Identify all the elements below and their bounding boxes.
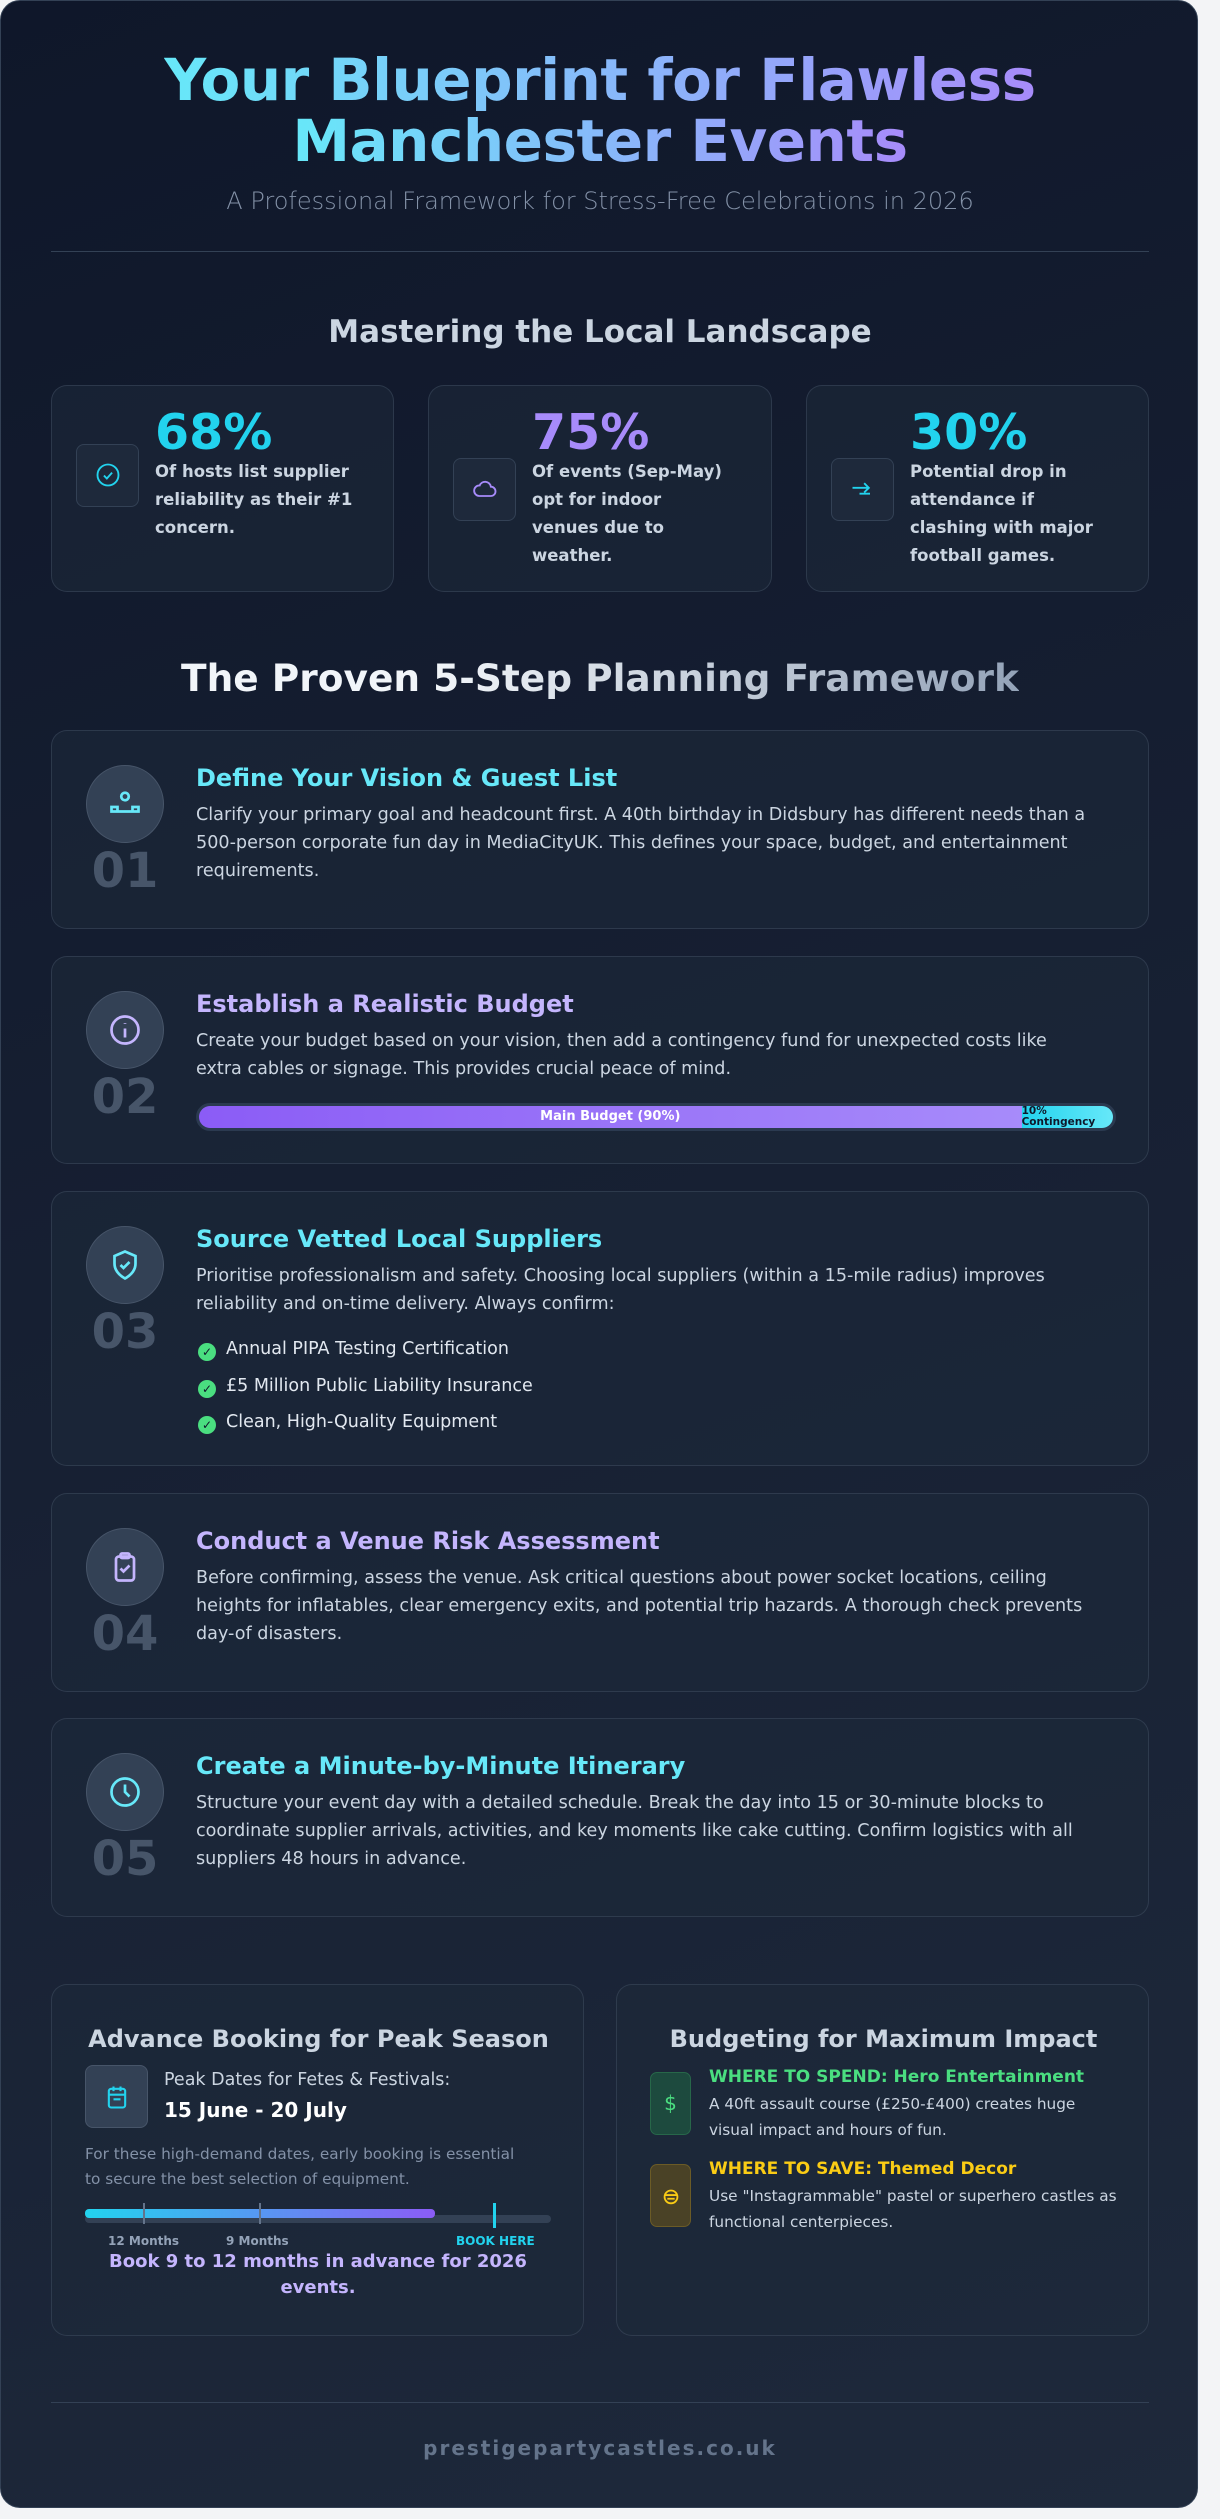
panel: budgeting: WHERE TO SAVE: Themed Decor — [709, 2159, 1016, 2179]
checklist: Clean, High-Quality Equipment — [226, 1412, 497, 1432]
panel: advance booking: to secure the best selection of equipment. — [85, 2170, 410, 2188]
icon: clock — [86, 1753, 164, 1831]
icon: people — [86, 765, 164, 843]
icon: clipboard — [86, 1528, 164, 1606]
icon: decor — [650, 2164, 691, 2227]
step 3 — [51, 1191, 1149, 1466]
footer: prestigepartycastles.co.uk — [423, 2436, 777, 2460]
step 4 — [51, 1493, 1149, 1692]
step 3: Source Vetted Local Suppliers — [196, 1225, 602, 1253]
budget bar: Contingency — [1022, 1116, 1095, 1128]
checklist: Annual PIPA Testing Certification — [226, 1339, 509, 1359]
step 1: 01 — [92, 843, 158, 899]
icon: check — [76, 444, 139, 506]
step 5: 05 — [92, 1831, 158, 1887]
step 3: 03 — [92, 1304, 158, 1360]
panel: advance booking — [51, 1984, 584, 2336]
budget bar — [196, 1103, 1116, 1131]
checklist — [198, 1339, 533, 1434]
step 5 — [51, 1718, 1149, 1917]
timeline: 9 Months — [226, 2234, 289, 2248]
step 5: Create a Minute-by-Minute Itinerary — [196, 1752, 685, 1780]
panel: advance booking: Book 9 to 12 months in advance for 2026 events. — [109, 2251, 527, 2298]
panel: budgeting: A 40ft assault course (£250-£400) creates huge visual impact and hours of fun. — [709, 2095, 1075, 2139]
icon: cloud — [453, 458, 516, 520]
checklist: ✓ — [202, 1345, 212, 1359]
step 5: Structure your event day with a detailed schedule. Break the day into 15 or 30-minute blocks to coordinate supplier arrivals, activities, and key moments like cake cutting. Confirm logistics with all suppliers 48 hours in advance. — [196, 1793, 1073, 1869]
panel: budgeting — [616, 1984, 1149, 2336]
icon: dollar — [650, 2072, 691, 2135]
panel: budgeting: WHERE TO SPEND: Hero Entertainment — [709, 2067, 1084, 2087]
stat card 2: 75% — [532, 404, 649, 461]
budget bar: 10% — [1022, 1105, 1047, 1117]
icon: dollar: $ — [664, 2091, 677, 2115]
timeline — [85, 2203, 551, 2248]
step 4: Before confirming, assess the venue. Ask critical questions about power socket locations, ceiling heights for inflatables, clear emergency exits, and potential trip hazards. A thorough check prevents day-of disasters. — [196, 1568, 1082, 1644]
stat card 1 — [51, 385, 394, 592]
title: Your Blueprint for Flawless — [164, 46, 1036, 114]
step 2 — [51, 956, 1149, 1164]
stat card 2 — [428, 385, 772, 592]
checklist: ✓ — [202, 1418, 212, 1432]
panel: advance booking: 15 June - 20 July — [164, 2098, 347, 2122]
panel: advance booking: Peak Dates for Fetes & Festivals: — [164, 2070, 450, 2090]
step 1 — [51, 730, 1149, 929]
panel: advance booking: Advance Booking for Peak Season — [88, 2025, 549, 2053]
stat card 2: Of events (Sep-May) opt for indoor — [532, 462, 722, 509]
title: Manchester Events — [292, 107, 908, 175]
icon: shield — [86, 1226, 164, 1304]
step title: Define Your Vision & Guest List — [196, 764, 617, 792]
step 2: Establish a Realistic Budget — [196, 990, 574, 1018]
step 2: 02 — [92, 1069, 158, 1125]
step 4: 04 — [92, 1606, 158, 1662]
timeline: 12 Months — [108, 2234, 179, 2248]
checklist: £5 Million Public Liability Insurance — [226, 1376, 533, 1396]
stat card 2: venues due to weather. — [532, 518, 664, 565]
checklist: ✓ — [202, 1382, 212, 1396]
heading: framework: The Proven 5-Step Planning Framework — [181, 656, 1019, 700]
stat card 1: 68% — [155, 404, 272, 461]
icon: info — [86, 991, 164, 1069]
stat card 1: Of hosts list supplier reliability as their #1 concern. — [155, 462, 352, 537]
timeline: BOOK HERE — [456, 2234, 535, 2248]
budget bar: Main Budget (90%) — [540, 1109, 680, 1124]
step 2: extra cables or signage. This provides crucial peace of mind. — [196, 1059, 731, 1079]
subtitle: A Professional Framework for Stress-Free Celebrations in 2026 — [226, 187, 974, 215]
stat card 3: Potential drop in attendance if clashing with major football games. — [910, 462, 1093, 565]
stat card 3 — [806, 385, 1149, 592]
panel: advance booking: For these high-demand dates, early booking is essential — [85, 2145, 514, 2163]
title — [164, 46, 1036, 175]
stat card 3: 30% — [910, 404, 1027, 461]
step 4: Conduct a Venue Risk Assessment — [196, 1527, 660, 1555]
step text: Clarify your primary goal and headcount first. A 40th birthday in Didsbury has different needs than a 500-person corporate fun day in MediaCityUK. This defines your space, budget, and entertainment requirements. — [196, 805, 1085, 881]
heading: local landscape: Mastering the Local Landscape — [328, 314, 872, 350]
icon: arrow — [831, 458, 894, 520]
icon: calendar — [85, 2065, 148, 2128]
step 2: Create your budget based on your vision, then add a contingency fund for unexpected costs like — [196, 1031, 1047, 1051]
panel: budgeting: Use "Instagrammable" pastel or superhero castles as functional centerpieces. — [709, 2187, 1117, 2231]
step 3: Prioritise professionalism and safety. Choosing local suppliers (within a 15-mile radius) improves reliability and on-time delivery. Always confirm: — [196, 1266, 1045, 1314]
panel: budgeting: Budgeting for Maximum Impact — [670, 2025, 1097, 2053]
